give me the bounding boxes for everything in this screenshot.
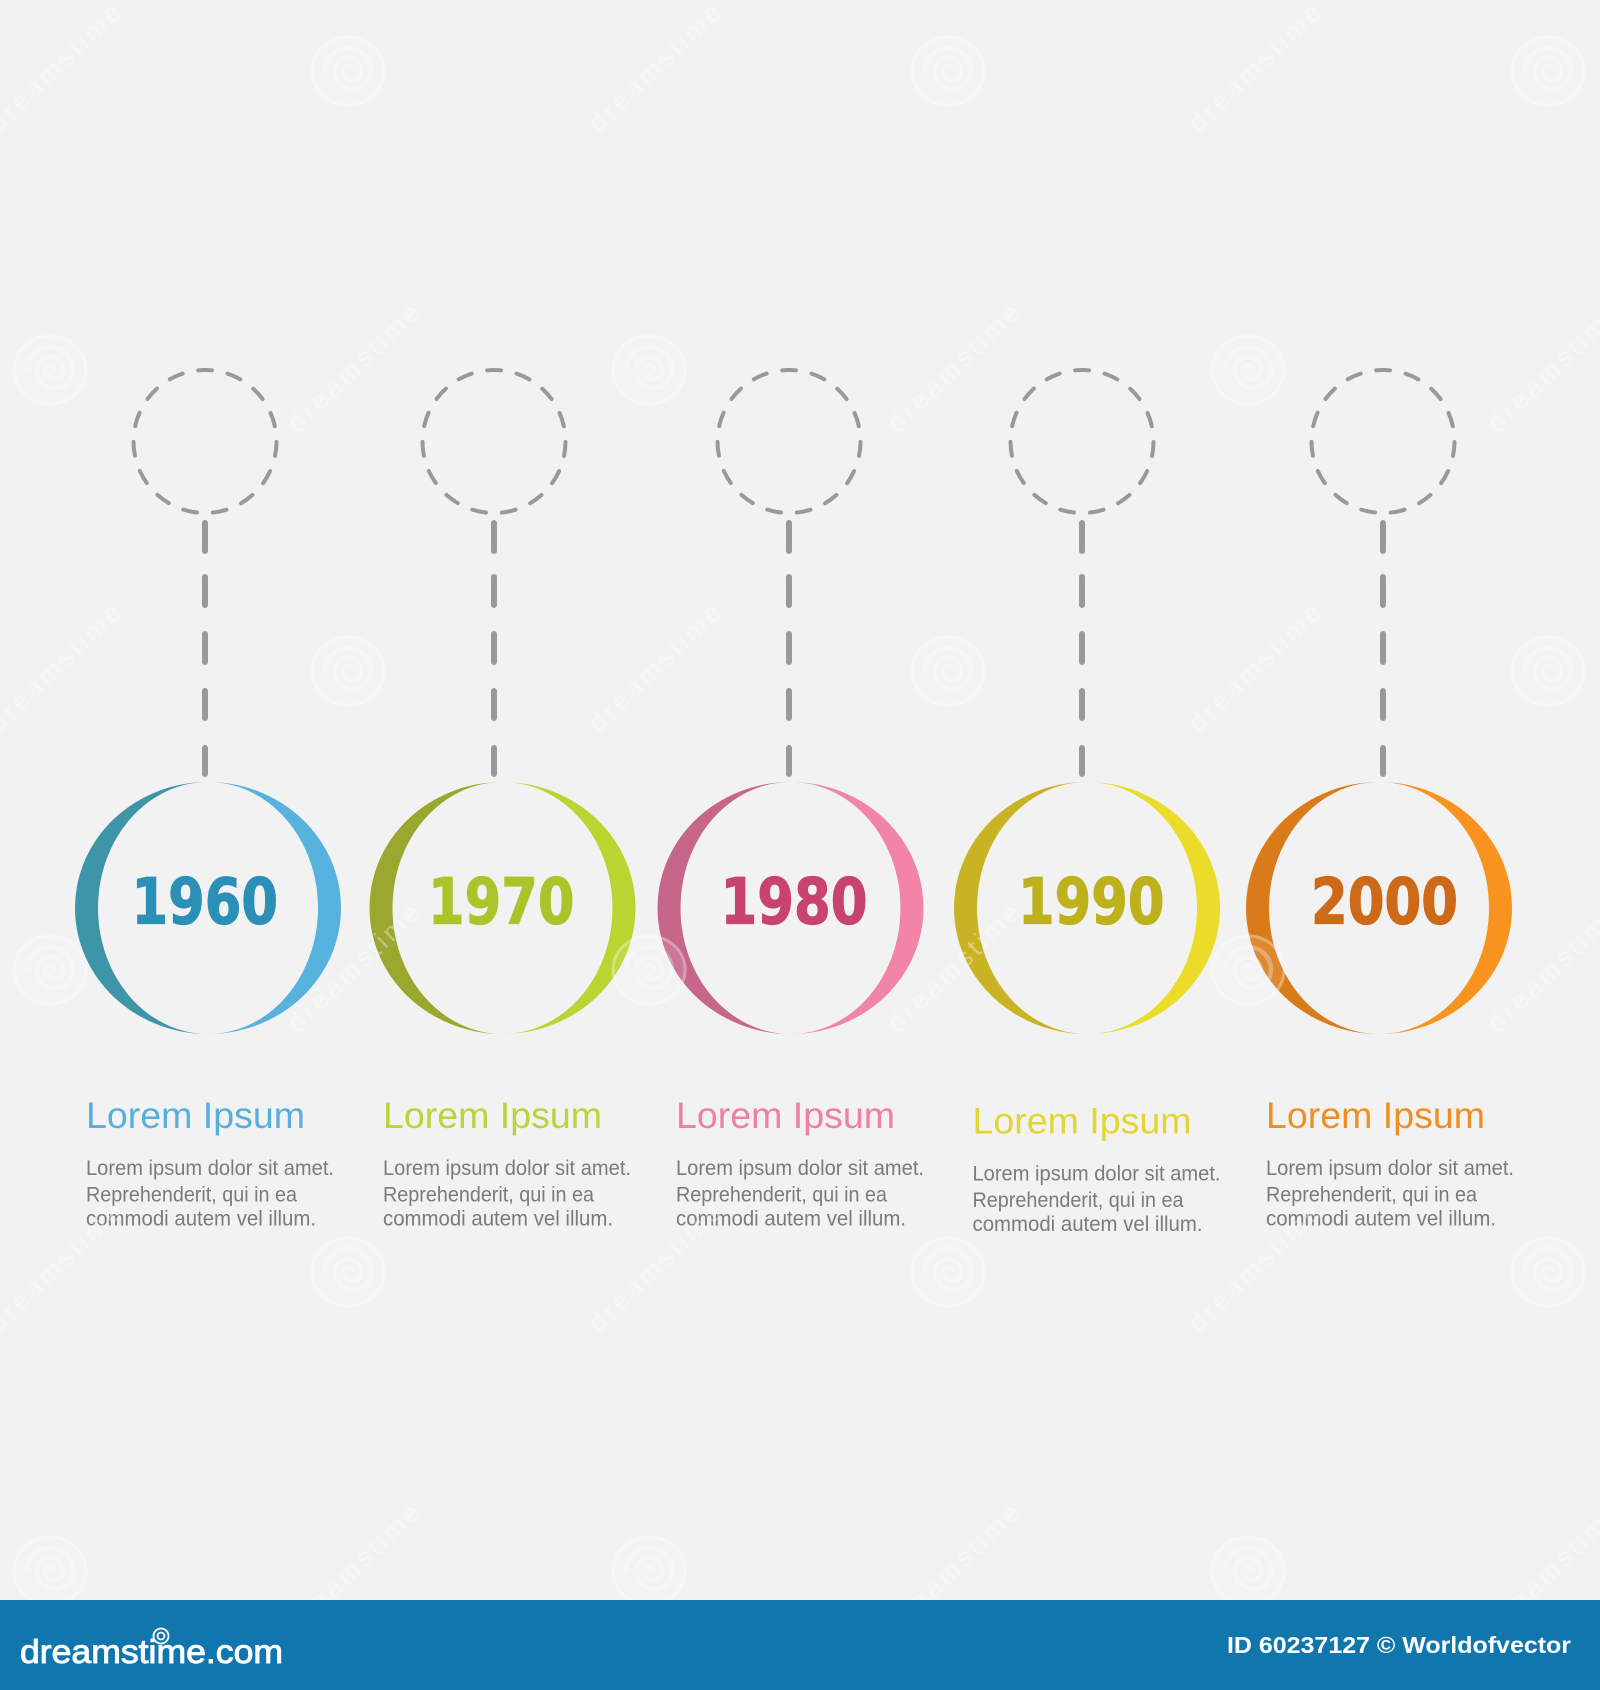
ring left crescent xyxy=(658,782,790,1034)
watermark pattern: dreamstime xyxy=(881,897,1026,1038)
heading: Lorem Ipsum xyxy=(676,1095,895,1136)
body text xyxy=(383,1157,631,1230)
watermark pattern: dreamstime xyxy=(281,297,426,438)
watermark pattern: dreamstime xyxy=(1182,597,1327,738)
ring left crescent xyxy=(1246,782,1379,1034)
body text: commodi autem vel illum. xyxy=(676,1208,906,1230)
dashed connector xyxy=(1380,523,1386,774)
watermark pattern: dreamstime xyxy=(281,1497,426,1638)
body text: Reprehenderit, qui in ea xyxy=(676,1184,887,1206)
footer image id and credit: ID 60237127 © Worldofvector xyxy=(1227,1632,1571,1658)
dashed circle placeholder xyxy=(134,370,276,513)
body text: Reprehenderit, qui in ea xyxy=(972,1189,1184,1212)
body text: Lorem ipsum dolor sit amet. xyxy=(676,1157,924,1180)
year: 1980 xyxy=(720,866,868,938)
footer logo text: dreamstime.com xyxy=(20,1633,283,1670)
body text: commodi autem vel illum. xyxy=(383,1208,613,1230)
body text: Lorem ipsum dolor sit amet. xyxy=(1266,1157,1514,1180)
dashed circle placeholder xyxy=(718,370,860,513)
dashed circle placeholder xyxy=(1010,370,1154,513)
body text: Reprehenderit, qui in ea xyxy=(86,1184,297,1206)
body text xyxy=(972,1162,1220,1236)
dashed connector xyxy=(1079,523,1085,774)
watermark pattern: dreamstime xyxy=(1182,1197,1327,1338)
icon: logo swirl xyxy=(154,1628,168,1644)
year: 2000 xyxy=(1311,866,1458,938)
timeline column: 1970 xyxy=(370,370,636,1230)
heading: Lorem Ipsum xyxy=(972,1100,1192,1142)
body text: commodi autem vel illum. xyxy=(972,1213,1202,1236)
ring left crescent xyxy=(954,782,1087,1034)
body text: commodi autem vel illum. xyxy=(1266,1208,1496,1230)
body text: Reprehenderit, qui in ea xyxy=(1266,1184,1477,1206)
body text xyxy=(676,1157,924,1230)
heading: Lorem Ipsum xyxy=(1266,1095,1485,1136)
ring left crescent xyxy=(75,782,208,1034)
year: 1970 xyxy=(428,866,574,938)
ring right crescent xyxy=(208,782,341,1034)
body text xyxy=(86,1157,334,1230)
timeline column: 1990 xyxy=(954,370,1220,1236)
ring left crescent xyxy=(370,782,502,1034)
body text: Lorem ipsum dolor sit amet. xyxy=(383,1157,631,1180)
ring right crescent xyxy=(1087,782,1220,1034)
body text: Lorem ipsum dolor sit amet. xyxy=(972,1162,1220,1186)
watermark pattern: dreamstime xyxy=(582,0,727,138)
timeline column: 2000 xyxy=(1246,370,1514,1230)
dashed connector xyxy=(202,523,208,774)
body text xyxy=(1266,1157,1514,1230)
dashed circle placeholder xyxy=(1312,370,1454,513)
watermark pattern: dreamstime xyxy=(582,597,727,738)
timeline column: 1960 xyxy=(75,370,341,1230)
watermark pattern: dreamstime xyxy=(881,1497,1026,1638)
heading: Lorem Ipsum xyxy=(86,1095,305,1136)
heading: Lorem Ipsum xyxy=(383,1095,602,1136)
watermark pattern: dreamstime xyxy=(881,297,1026,438)
body text: Reprehenderit, qui in ea xyxy=(383,1184,594,1206)
dashed connector xyxy=(491,523,497,774)
dashed connector xyxy=(786,523,792,774)
ring right crescent xyxy=(502,782,636,1034)
dashed circle placeholder xyxy=(422,370,566,513)
watermark pattern: dreamstime xyxy=(281,897,426,1038)
year: 1960 xyxy=(132,866,278,938)
body text: Lorem ipsum dolor sit amet. xyxy=(86,1157,334,1180)
watermark pattern: dreamstime xyxy=(582,1197,727,1338)
footer bar xyxy=(0,1600,1600,1690)
ring right crescent xyxy=(1379,782,1512,1034)
timeline column: 1980 xyxy=(658,370,924,1230)
watermark pattern: dreamstime xyxy=(1182,0,1327,138)
year: 1990 xyxy=(1018,866,1164,938)
body text: commodi autem vel illum. xyxy=(86,1208,316,1230)
ring right crescent xyxy=(790,782,924,1034)
